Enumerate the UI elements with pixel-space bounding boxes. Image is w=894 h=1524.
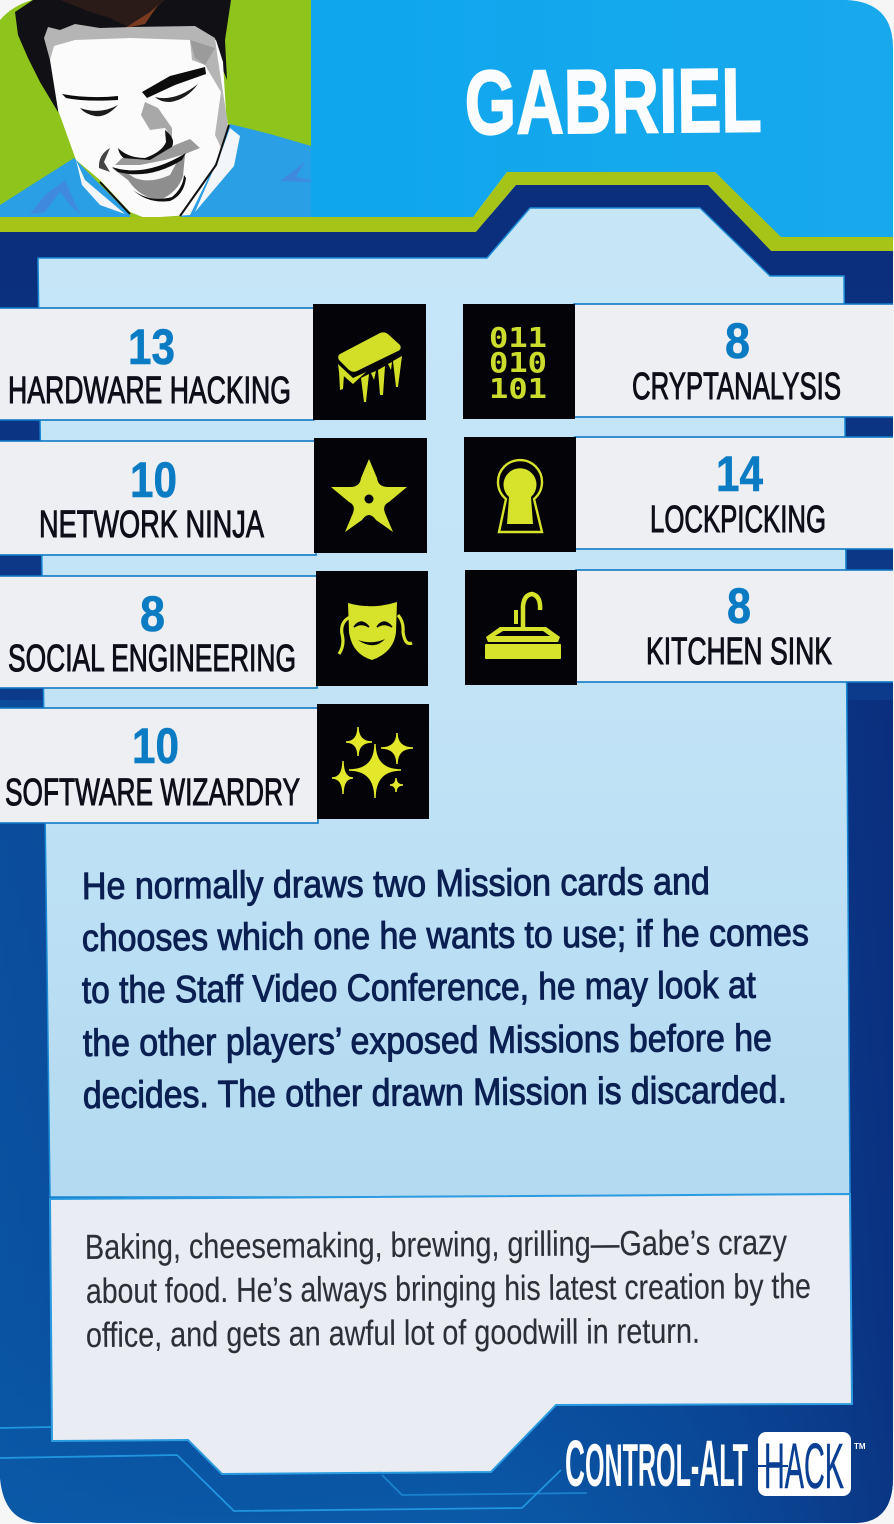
- stat bar: [576, 570, 894, 682]
- stat bar: [0, 441, 316, 555]
- stat: cryptanalysis: [463, 304, 894, 419]
- stat bar: [0, 576, 317, 688]
- portrait hair: [15, 0, 231, 112]
- ability text: to the Staff Video Conference, he may look at: [82, 965, 756, 1012]
- icon: sparkles: [317, 704, 429, 819]
- label: NETWORK NINJA: [39, 504, 264, 546]
- value: 8: [140, 586, 165, 642]
- ability text: He normally draws two Mission cards and: [82, 861, 710, 908]
- icon: binary digits: 011: [489, 321, 547, 354]
- logo: Control-Alt-Hack: [565, 1426, 866, 1502]
- stat: software wizardry: [0, 704, 429, 823]
- title: GABRIEL: [464, 50, 762, 154]
- ability text: [82, 861, 809, 1117]
- portrait moustache: [115, 139, 200, 165]
- portrait collar: [76, 128, 240, 214]
- green accent stripe: [0, 172, 894, 251]
- portrait shirt: [0, 124, 311, 219]
- icon: shuriken: [314, 438, 427, 553]
- portrait face shading: [44, 24, 228, 150]
- stat: lockpicking: [464, 437, 894, 552]
- circuit lines: [0, 1427, 587, 1511]
- value: 10: [132, 718, 179, 774]
- stat: network ninja: [0, 438, 427, 555]
- icon: binary digits: 010: [489, 346, 547, 379]
- icon: binary digits: [463, 304, 575, 419]
- stat: kitchen sink: [465, 570, 894, 685]
- trademark: TM: [854, 1442, 866, 1451]
- icon: theatre mask: [316, 571, 428, 686]
- flavor text: office, and gets an awful lot of goodwill in return.: [86, 1312, 700, 1355]
- icon: keyhole: [464, 437, 576, 552]
- ability text: chooses which one he wants to use; if he comes: [82, 912, 809, 960]
- portrait mouth: [112, 155, 185, 200]
- label: HARDWARE HACKING: [8, 370, 291, 412]
- value: 8: [727, 578, 751, 634]
- portrait face: [48, 28, 228, 218]
- value: 13: [128, 319, 175, 375]
- icon: binary digits: 101: [489, 372, 547, 405]
- value: 10: [130, 452, 177, 508]
- ability text: decides. The other drawn Mission is discarded.: [83, 1069, 787, 1117]
- header blue band: [311, 0, 894, 240]
- portrait eyes and brows: [62, 67, 206, 101]
- label: SOFTWARE WIZARDRY: [5, 772, 300, 814]
- portrait background: [0, 0, 311, 219]
- navy frame stripe: [476, 185, 771, 251]
- stat bar: [0, 708, 318, 823]
- flavor text: [85, 1223, 811, 1355]
- label: SOCIAL ENGINEERING: [8, 638, 296, 680]
- icon: microchip: [313, 304, 426, 420]
- stat: social engineering: [0, 571, 428, 688]
- portrait: [0, 0, 311, 219]
- icon: sink: [465, 570, 577, 685]
- value: 8: [725, 313, 750, 369]
- logo badge: [758, 1432, 851, 1496]
- portrait jaw lines: [100, 125, 229, 216]
- portrait nose and cheek: [118, 130, 173, 163]
- stat bar: [574, 304, 894, 417]
- stat bar: [0, 308, 314, 420]
- logo words: CONTROL-ALT: [565, 1426, 748, 1500]
- stat: hardware hacking: [0, 304, 426, 420]
- ability text: the other players’ exposed Missions before he: [83, 1018, 772, 1065]
- stat bar: [575, 437, 894, 549]
- value: 14: [716, 446, 763, 502]
- flavor panel: [50, 1194, 852, 1474]
- rules panel: [38, 208, 850, 1197]
